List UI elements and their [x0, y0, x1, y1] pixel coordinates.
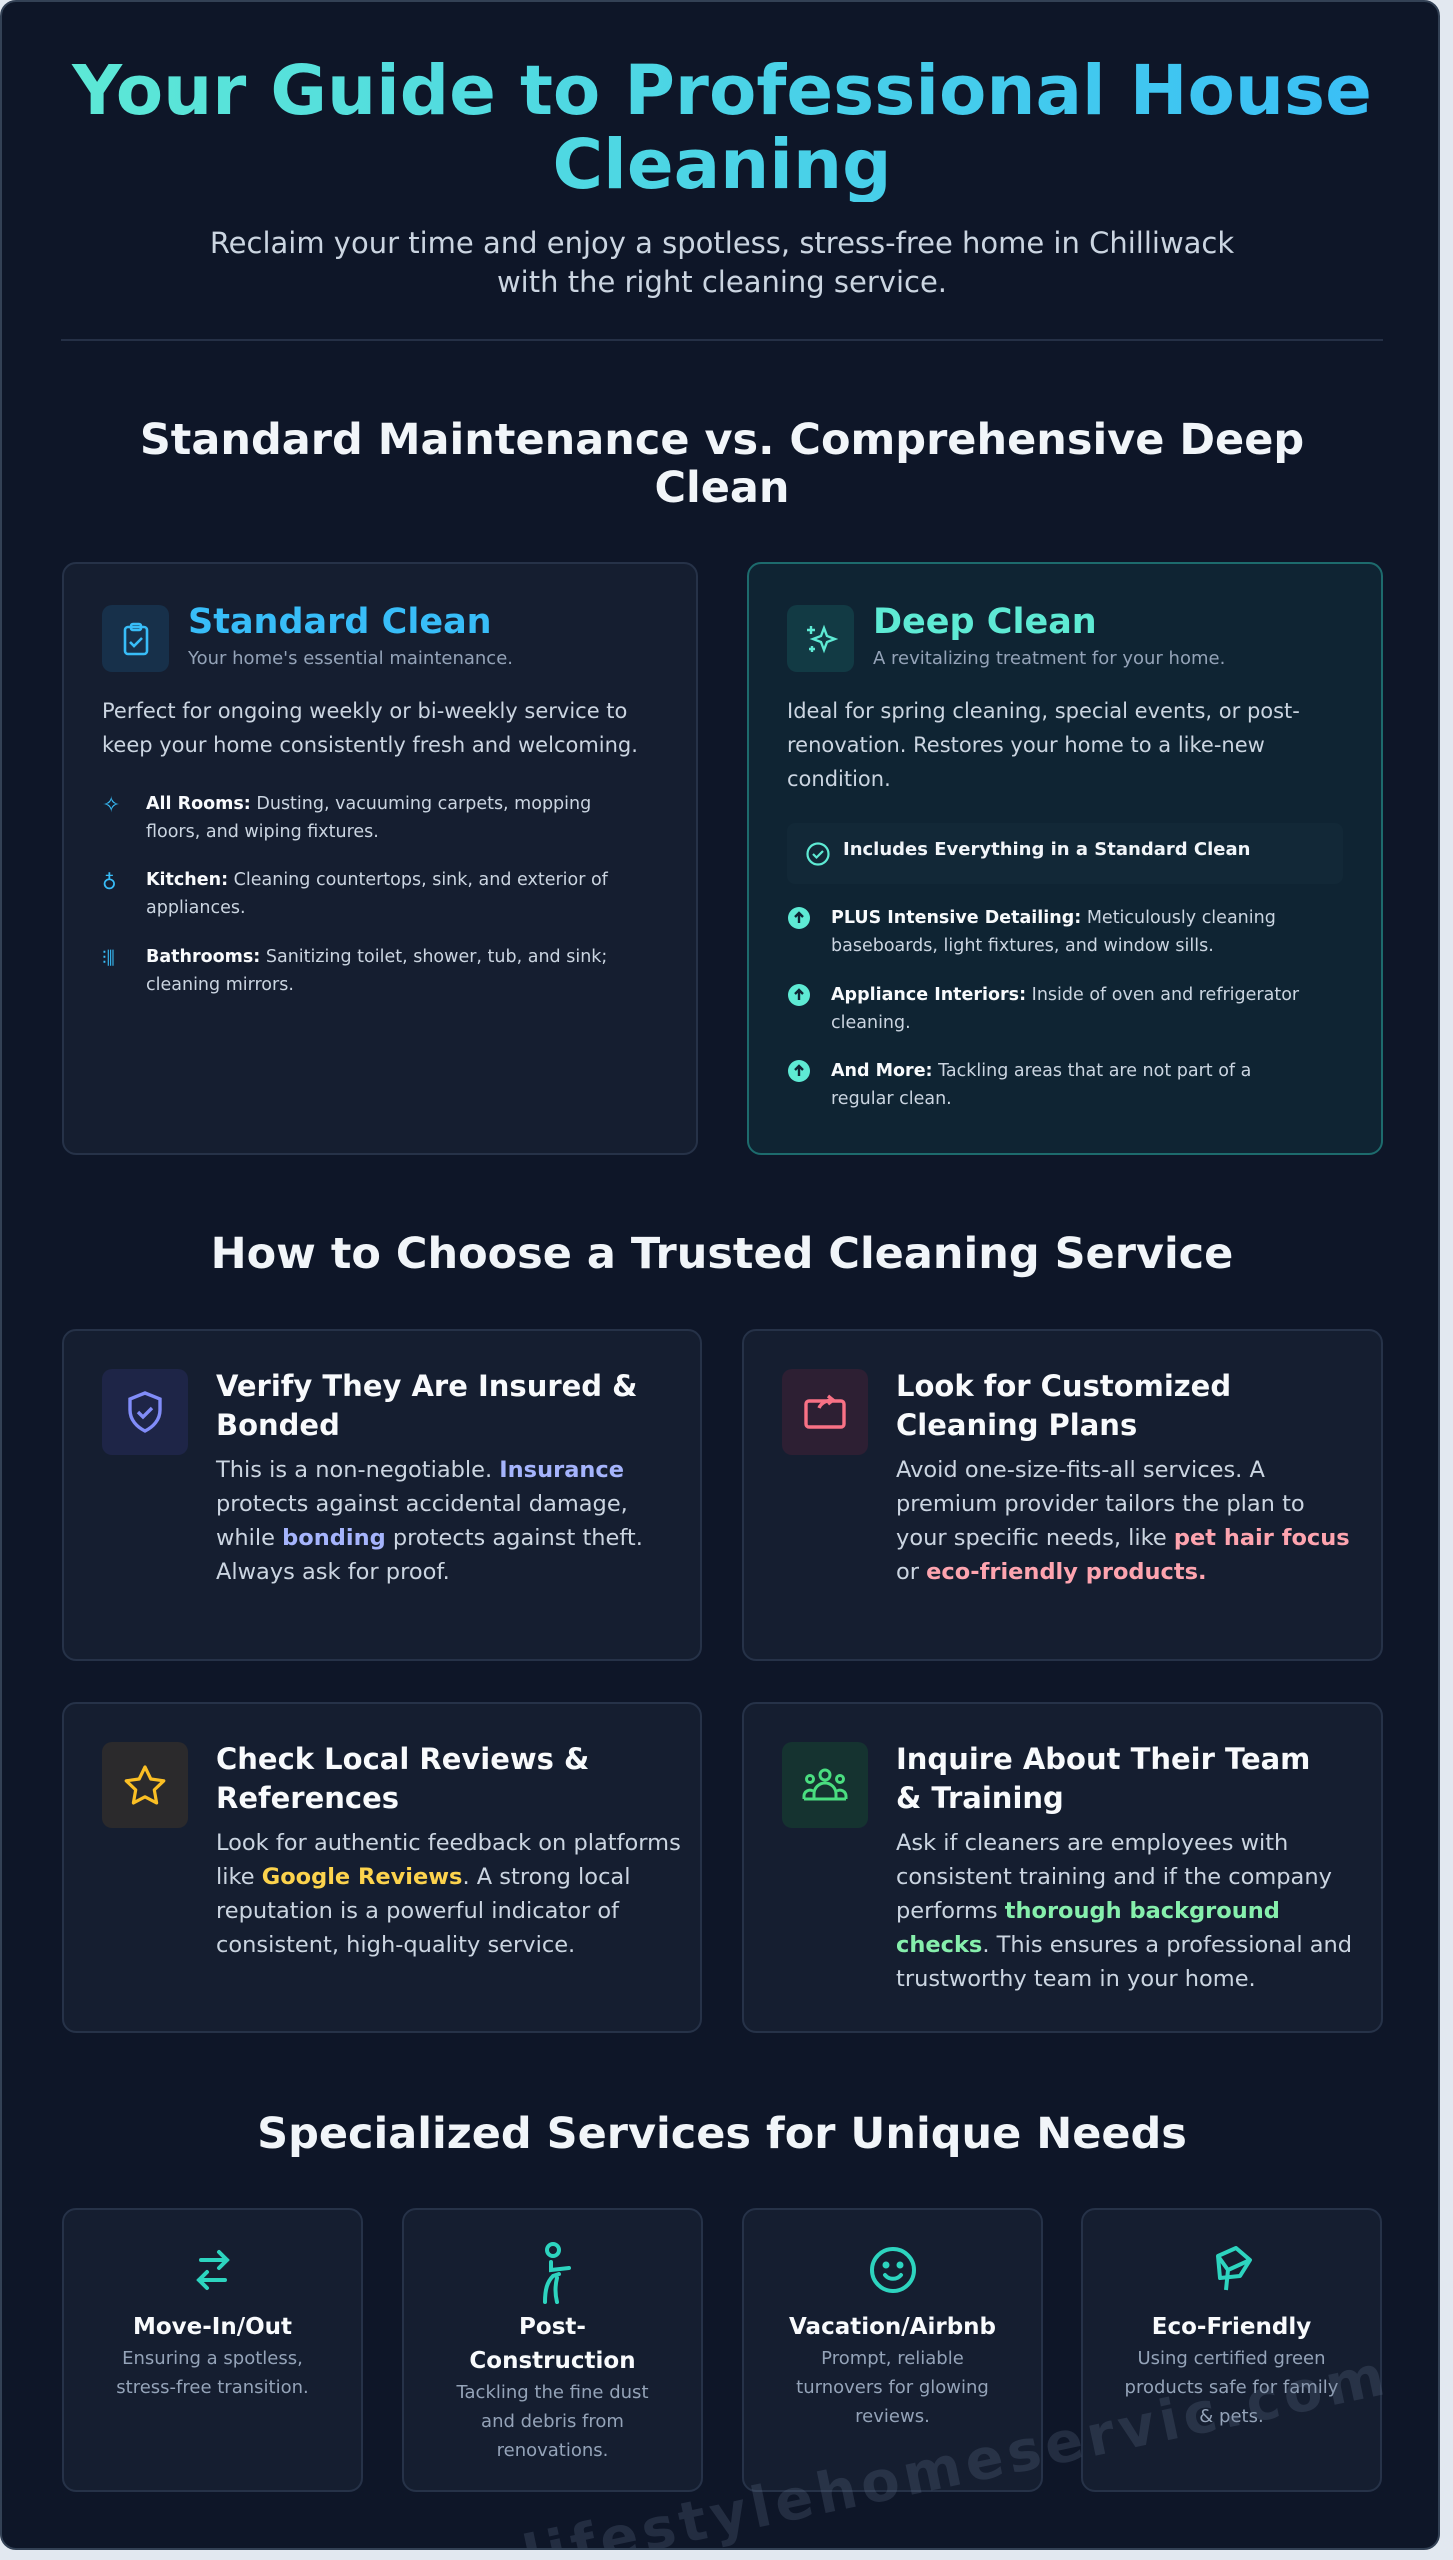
- deep description: Ideal for spring cleaning, special events, or post-renovation. Restores your home to a like-new condition.: [787, 699, 1300, 791]
- panel: deep clean: A revitalizing treatment for your home.: [873, 648, 1225, 669]
- panel: standard clean: ♁: [102, 870, 117, 894]
- panel: reviews: Check Local Reviews & References: [216, 1742, 589, 1815]
- bullet list: standard: Kitchen: Cleaning countertops, sink, and exterior of appliances.: [146, 870, 608, 918]
- title: Cleaning: [553, 125, 891, 205]
- panel: eco-friendly: [1081, 2208, 1382, 2492]
- icon: sparkles: [787, 605, 854, 672]
- heading: comparison: Standard Maintenance vs. Comprehensive Deep: [140, 415, 1304, 465]
- panel: insured & bonded: This is a non-negotiable. Insurance protects against accidental damage, while bonding protects against theft. Always ask for proof.: [216, 1457, 643, 1585]
- title: [2, 54, 1442, 202]
- panel: insured & bonded: [62, 1329, 702, 1661]
- panel: move-in/out: [62, 2208, 363, 2492]
- subtitle: [210, 226, 1234, 299]
- panel: customized plans: [742, 1329, 1383, 1661]
- callout: includes standard: [787, 823, 1343, 884]
- callout: includes standard: Includes Everything in a Standard Clean: [843, 839, 1250, 860]
- panel: standard clean: Your home's essential maintenance.: [188, 648, 513, 669]
- icon: leaf: [1216, 2246, 1252, 2290]
- panel: post-construction: Post-: [519, 2314, 586, 2340]
- icon: arrows: [196, 2250, 230, 2290]
- icon: clipboard: [102, 605, 169, 672]
- bullet list: standard: [102, 793, 608, 995]
- bullet list: deep: Appliance Interiors: Inside of oven and refrigerator cleaning.: [831, 985, 1299, 1033]
- title: Your Guide to Professional House: [72, 51, 1372, 131]
- standard clean title: Standard Clean: [188, 602, 492, 642]
- panel: post-construction: Construction: [469, 2348, 636, 2374]
- panel: post-construction: Tackling the fine dust and debris from renovations.: [456, 2382, 648, 2461]
- panel: standard clean: [62, 562, 698, 1155]
- bullet list: standard: All Rooms: Dusting, vacuuming carpets, mopping floors, and wiping fixtures.: [146, 794, 591, 842]
- panel: deep clean: [747, 562, 1383, 1155]
- subtitle: Reclaim your time and enjoy a spotless, stress-free home in Chilliwack: [210, 226, 1234, 260]
- panel: vacation/airbnb: Prompt, reliable turnovers for glowing reviews.: [796, 2348, 989, 2427]
- heading: comparison: Clean: [654, 463, 790, 513]
- panel: team & training: [742, 1702, 1383, 2033]
- deep clean title: Deep Clean: [873, 602, 1097, 642]
- heading: comparison: [140, 415, 1304, 513]
- heading: how to choose: How to Choose a Trusted Cleaning Service: [211, 1229, 1233, 1279]
- panel: customized plans: Avoid one-size-fits-all services. A premium provider tailors the plan to your specific needs, like pet hair focus or eco-friendly products.: [896, 1457, 1350, 1585]
- icon: smile: [870, 2247, 916, 2293]
- panel: standard clean: ✧: [102, 793, 120, 818]
- panel: eco-friendly: Eco-Friendly: [1152, 2314, 1311, 2340]
- panel: post-construction: [402, 2208, 703, 2492]
- icon: star: [102, 1742, 188, 1828]
- panel: eco-friendly: Using certified green products safe for family & pets.: [1125, 2348, 1338, 2427]
- panel: team & training: Inquire About Their Team & Training: [896, 1742, 1310, 1815]
- heading: specialized services: Specialized Services for Unique Needs: [257, 2109, 1187, 2159]
- icon: screen share: [782, 1369, 868, 1455]
- panel: reviews: Look for authentic feedback on platforms like Google Reviews. A strong local reputation is a powerful indicator of consistent, high-quality service.: [216, 1830, 681, 1958]
- panel: vacation/airbnb: [742, 2208, 1043, 2492]
- icon: worker: [543, 2242, 571, 2304]
- icon: shield: [102, 1369, 188, 1455]
- panel: customized plans: Look for Customized Cleaning Plans: [896, 1369, 1231, 1442]
- bullet list: deep: PLUS Intensive Detailing: Meticulously cleaning baseboards, light fixtures, and window sills.: [831, 908, 1276, 956]
- bullet list: standard: Bathrooms: Sanitizing toilet, shower, tub, and sink; cleaning mirrors.: [146, 947, 607, 995]
- bullet list: deep: And More: Tackling areas that are not part of a regular clean.: [831, 1061, 1251, 1109]
- panel: reviews: [62, 1702, 702, 2033]
- panel: vacation/airbnb: Vacation/Airbnb: [789, 2314, 996, 2340]
- panel: move-in/out: Move-In/Out: [133, 2314, 292, 2340]
- panel: team & training: Ask if cleaners are employees with consistent training and if the company performs thorough background checks. This ensures a professional and trustworthy team in your home.: [896, 1830, 1352, 1992]
- icon: team: [782, 1742, 868, 1828]
- panel: move-in/out: Ensuring a spotless, stress-free transition.: [116, 2348, 309, 2398]
- panel: standard clean: ⫶⫼: [102, 948, 115, 969]
- panel: insured & bonded: Verify They Are Insured & Bonded: [216, 1369, 637, 1442]
- standard description: Perfect for ongoing weekly or bi-weekly service to keep your home consistently fresh and welcoming.: [102, 699, 638, 757]
- bullet list: deep: [788, 907, 1300, 1109]
- subtitle: with the right cleaning service.: [497, 265, 947, 299]
